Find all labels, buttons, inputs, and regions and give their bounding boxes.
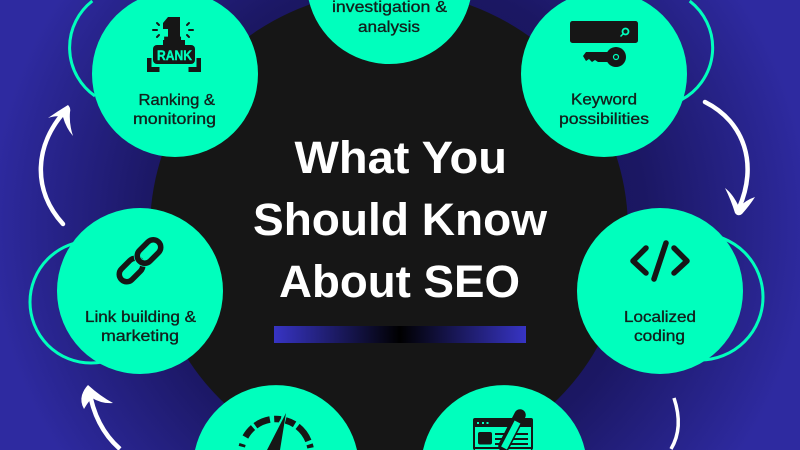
node: top investigation xyxy=(309,0,470,64)
arrow: keyword to coding xyxy=(705,102,755,215)
title: What You xyxy=(294,132,507,183)
arrow: bottom to link building xyxy=(81,385,120,449)
title: About SEO xyxy=(279,256,520,307)
central black circle xyxy=(150,0,628,450)
ring: keyword xyxy=(681,1,713,100)
ring: link building xyxy=(30,241,152,363)
icon: rank trophy: 1 xyxy=(163,12,181,48)
label: link building & marketing xyxy=(85,309,196,345)
label: investigation & analysis xyxy=(332,0,447,36)
icon: speedometer xyxy=(242,409,310,450)
node: keyword possibilities xyxy=(521,0,687,157)
label: localized coding: Localized xyxy=(624,309,696,326)
ring: localized coding xyxy=(637,234,763,360)
label: investigation & analysis: analysis xyxy=(358,19,420,36)
label: link building & marketing: Link building & xyxy=(85,309,196,326)
arrow: coding to bottom xyxy=(671,398,678,449)
label: link building & marketing: marketing xyxy=(101,328,179,345)
title xyxy=(253,132,548,307)
label: keyword possibilities: possibilities xyxy=(559,111,649,128)
icon: rank trophy: RANK xyxy=(157,47,192,63)
node: localized coding xyxy=(577,208,743,374)
label: localized coding: coding xyxy=(634,328,685,345)
title: Should Know xyxy=(253,194,548,245)
label: localized coding xyxy=(624,309,696,345)
label: ranking & monitoring: monitoring xyxy=(133,111,216,128)
icon: browser and pen xyxy=(473,415,533,450)
icon: chain link xyxy=(116,237,164,285)
gradient accent bar xyxy=(274,326,526,343)
ring: ranking xyxy=(70,1,95,96)
node: link building & marketing xyxy=(57,208,223,374)
node: ranking & monitoring xyxy=(92,0,258,157)
icon: search bar and key xyxy=(570,21,638,67)
node: content browser xyxy=(423,385,585,450)
label: ranking & monitoring: Ranking & xyxy=(138,92,215,109)
label: keyword possibilities xyxy=(559,92,649,128)
icon: code brackets xyxy=(633,243,687,279)
arrow: link building to ranking xyxy=(41,105,73,224)
label: keyword possibilities: Keyword xyxy=(571,92,637,108)
label: ranking & monitoring xyxy=(133,92,216,128)
icon: rank trophy xyxy=(147,12,201,72)
node: speed gauge xyxy=(195,385,357,450)
